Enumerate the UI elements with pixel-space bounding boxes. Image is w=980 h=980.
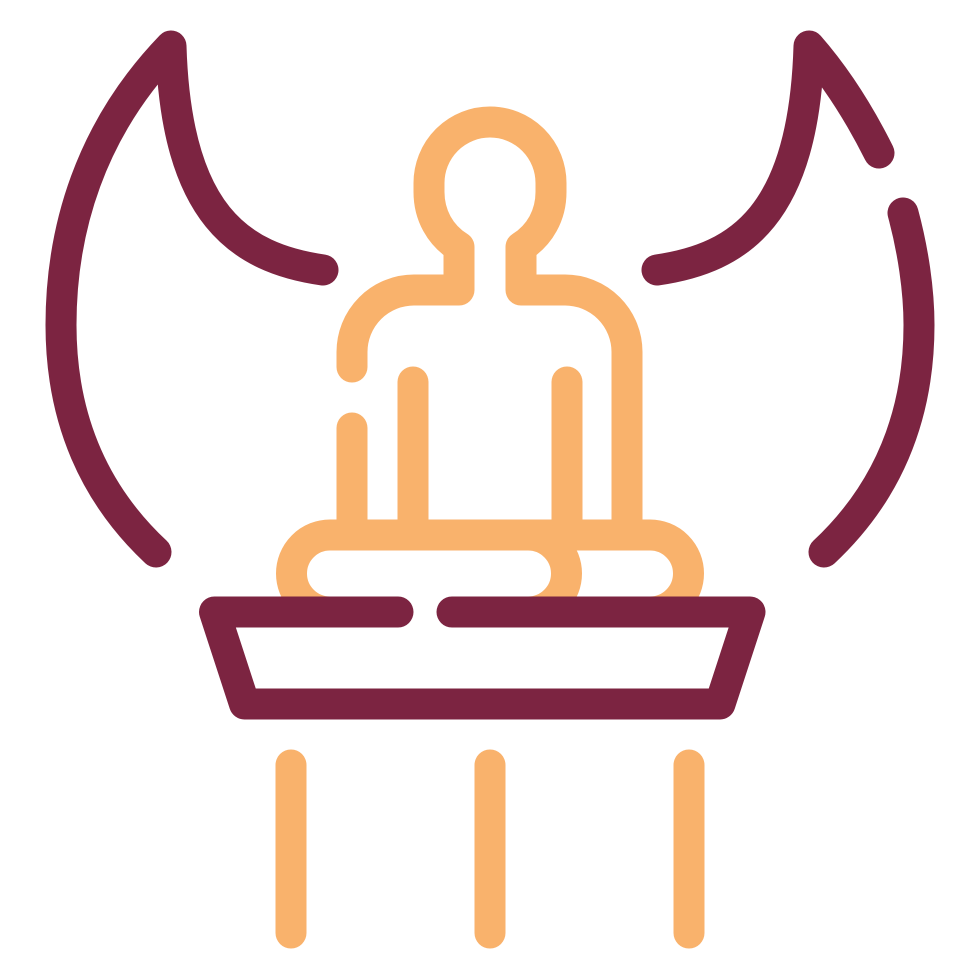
icon: right wing <box>657 46 919 552</box>
icon: platform <box>214 612 750 704</box>
icon: seated figure <box>292 122 688 612</box>
icon: levitation lines <box>291 765 689 933</box>
icon: left wing <box>61 46 323 552</box>
